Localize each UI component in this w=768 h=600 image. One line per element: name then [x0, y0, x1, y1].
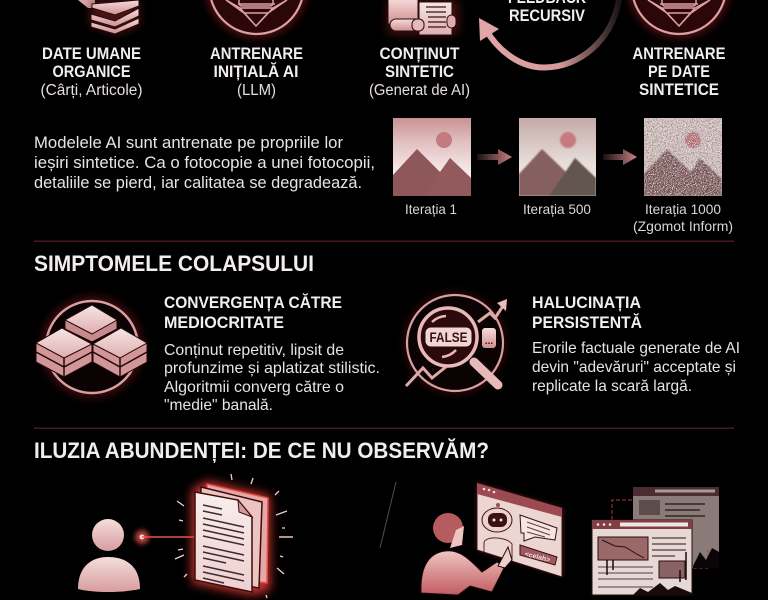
- text: recursive feedback label: RECURSIV: [509, 6, 586, 25]
- icon: person: [78, 519, 140, 592]
- text: persistent hallucination: Erorile factuale generate de AI: [532, 340, 740, 357]
- icon: glowing stack of documents: [175, 474, 287, 598]
- text block: explanation: Modelele AI sunt antrenate pe propriile lor: [34, 134, 344, 152]
- heading: symptoms: SIMPTOMELE COLAPSULUI: [34, 251, 314, 276]
- text: synthetic content: [369, 44, 470, 99]
- icon: man pointing at chatbot window: <celah>: [524, 551, 551, 564]
- arrow: iteration 1 to 500: [477, 149, 512, 165]
- text: convergence to mediocrity: [164, 293, 380, 414]
- text: initial AI training: INIȚIALĂ AI: [214, 62, 298, 81]
- text: synthetic content: SINTETIC: [385, 62, 454, 81]
- text: persistent hallucination: devin "adevăruri" acceptate și: [532, 359, 736, 376]
- text: persistent hallucination: replicate la scară largă.: [532, 378, 692, 395]
- text: training on synthetic data: [632, 44, 726, 99]
- text: initial AI training: ANTRENARE: [210, 44, 303, 63]
- text block: explanation: detaliile se pierd, iar calitatea se degradează.: [34, 174, 362, 192]
- captions: iterations: (Zgomot Inform): [633, 218, 733, 234]
- captions: iterations: Iterația 1: [405, 201, 457, 217]
- text: convergence to mediocrity: MEDIOCRITATE: [164, 313, 284, 332]
- image: iteration 1000 noisy: [644, 118, 722, 196]
- captions: iterations: Iterația 1000: [645, 201, 721, 217]
- image: iteration 1: [393, 118, 471, 196]
- image: iteration 500: [519, 118, 596, 196]
- icon: magnifying glass on FALSE: FALSE: [430, 329, 468, 345]
- captions: iterations: [405, 201, 733, 234]
- text: persistent hallucination: [532, 293, 740, 395]
- text: synthetic content: (Generat de AI): [369, 82, 470, 99]
- text: persistent hallucination: HALUCINAȚIA: [532, 293, 641, 312]
- text block: explanation: [34, 134, 375, 192]
- text: synthetic content: CONȚINUT: [380, 44, 460, 63]
- icon: corrupted web pages: [592, 487, 719, 595]
- text: convergence to mediocrity: "medie" banală.: [164, 397, 273, 414]
- text: organic human data: DATE UMANE: [42, 44, 141, 63]
- arrow: iteration 500 to 1000: [603, 149, 637, 165]
- text: persistent hallucination: PERSISTENTĂ: [532, 313, 642, 332]
- text: training on synthetic data: PE DATE: [648, 62, 710, 81]
- captions: iterations: Iterația 500: [523, 201, 591, 217]
- icon: synthetic content documents: [388, 0, 458, 35]
- icon: magnifying glass on FALSE: [405, 293, 507, 393]
- text: initial AI training: [210, 44, 303, 99]
- text: convergence to mediocrity: profunzime și aplatizat stilistic.: [164, 360, 380, 377]
- text: initial AI training: (LLM): [237, 82, 276, 99]
- text: training on synthetic data: ANTRENARE: [632, 44, 726, 63]
- text: organic human data: ORGANICE: [52, 62, 130, 81]
- text: organic human data: [40, 44, 142, 99]
- text: convergence to mediocrity: Algoritmii converg către o: [164, 379, 344, 396]
- icon: AI gem circle on synthetic data: [629, 0, 729, 37]
- icon: man pointing at chatbot window: [421, 483, 563, 595]
- heading: illusion of abundance: ILUZIA ABUNDENȚEI: DE CE NU OBSERVĂM?: [34, 438, 489, 463]
- text: recursive feedback label: [508, 0, 587, 25]
- arrow: recursive feedback loop: [479, 0, 619, 68]
- connector: light beam: [135, 530, 293, 544]
- icon: stack of books: [78, 0, 139, 34]
- text block: explanation: ieșiri sintetice. Ca o fotocopie a unei fotocopii,: [34, 154, 375, 172]
- text: convergence to mediocrity: CONVERGENȚA CĂTRE: [164, 293, 342, 312]
- text: training on synthetic data: SINTETICE: [639, 80, 719, 99]
- text: convergence to mediocrity: Conținut repetitiv, lipsit de: [164, 342, 344, 359]
- icon: stacked blocks convergence: [36, 297, 147, 397]
- icon: magnifying glass on FALSE: ...: [485, 336, 493, 347]
- icon: AI gem circle: [206, 0, 306, 37]
- text: organic human data: (Cârți, Articole): [40, 82, 142, 99]
